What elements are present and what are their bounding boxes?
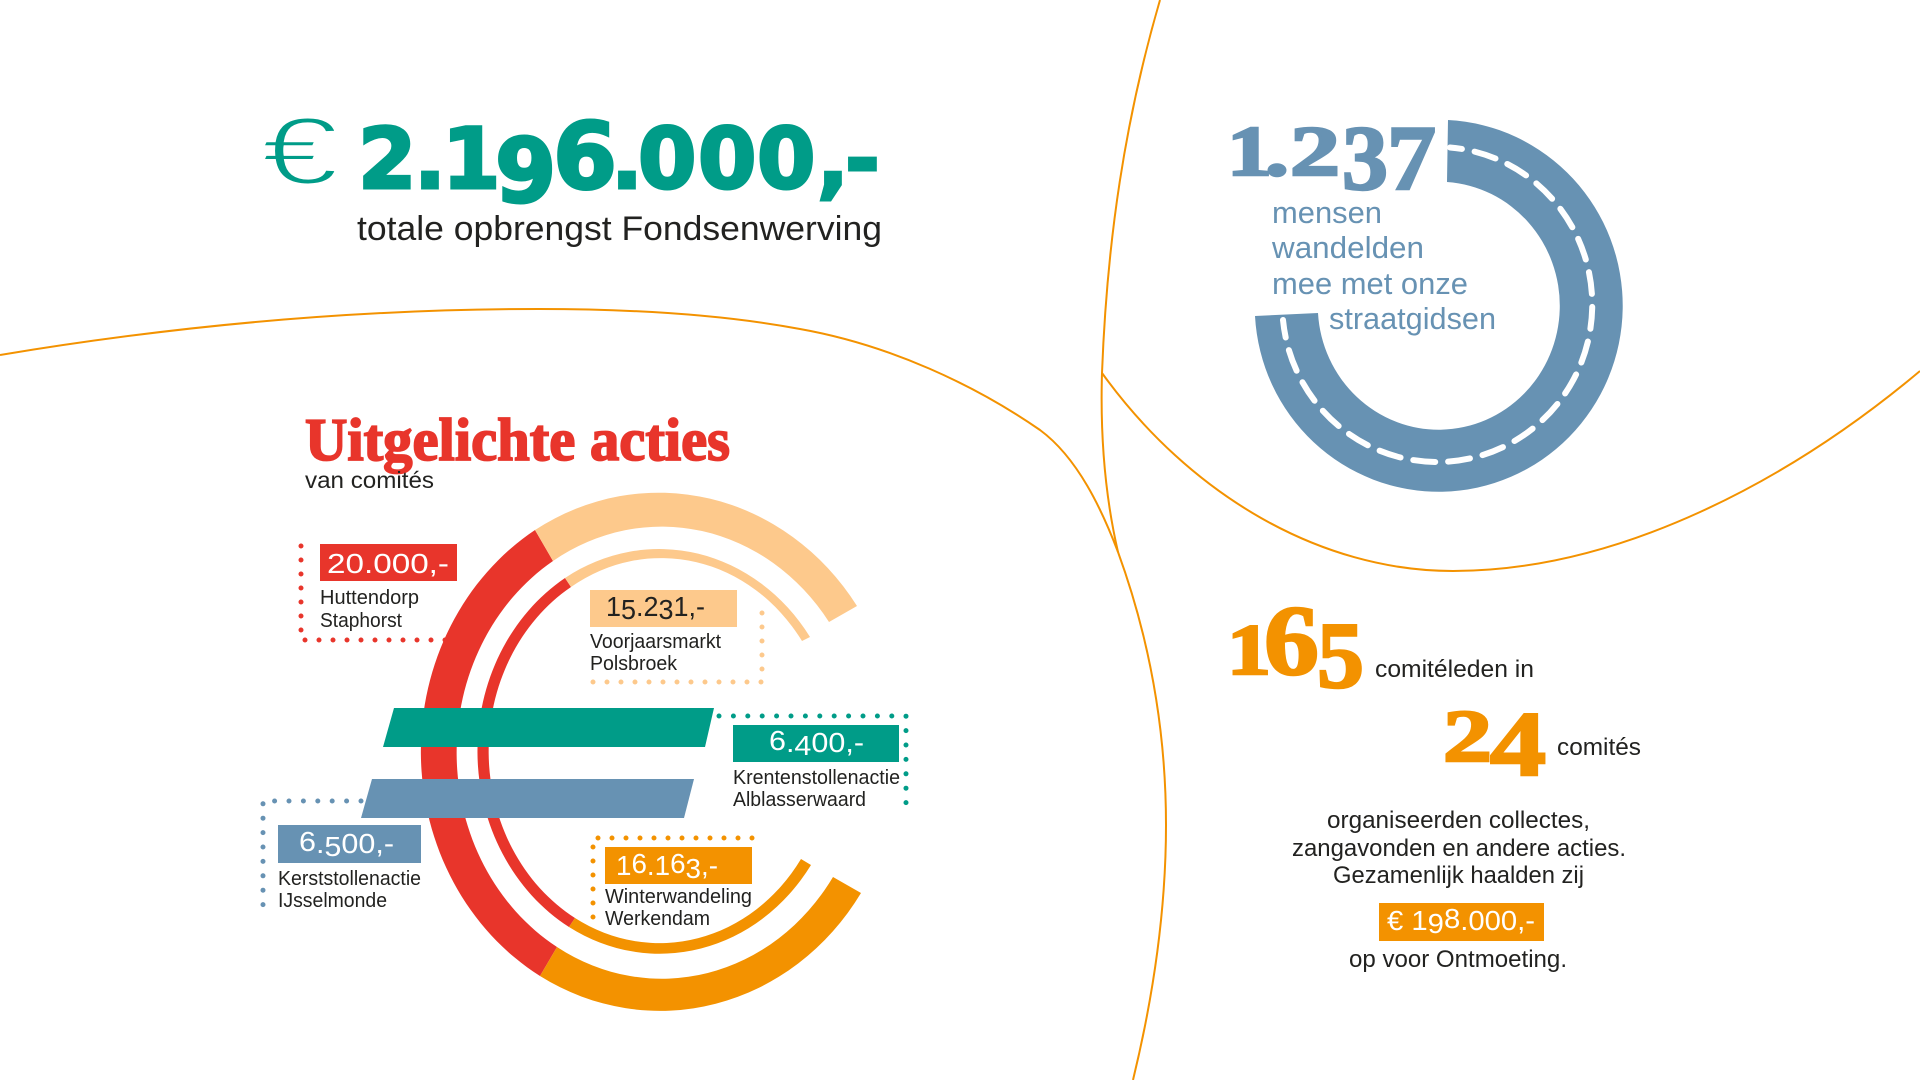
walkers description: wandelden (1271, 230, 1424, 265)
walkers description: mee met onze (1272, 266, 1468, 301)
walkers number: 7 (1387, 107, 1436, 209)
callout: Winterwandeling: 16.163,- (616, 848, 718, 884)
number 165: 1 (1227, 610, 1271, 690)
callout: Voorjaarsmarkt (590, 590, 762, 682)
total amount: 0 (638, 110, 696, 208)
number 165: 6 (1264, 585, 1319, 696)
callout: Huttendorp (301, 544, 457, 640)
panel: total revenue (261, 98, 882, 248)
total amount: 9 (495, 120, 556, 223)
road ring (1255, 120, 1623, 492)
callout: Winterwandeling: Winterwandeling (605, 886, 752, 908)
total amount: , (817, 110, 849, 208)
icon: euro sign: € (261, 98, 339, 205)
road centre dashes (1283, 148, 1592, 462)
outer arc: peach (535, 493, 857, 622)
callout: Krentenstollenactie: Krentenstollenactie (733, 767, 900, 789)
inner arc: orange (569, 859, 811, 954)
total amount: 2 (358, 110, 416, 208)
callout: Krentenstollenactie: 6.400,- (769, 725, 864, 761)
inner arc: peach (565, 549, 810, 641)
walkers description: straatgidsen (1329, 301, 1496, 336)
callout: Winterwandeling (593, 838, 752, 930)
amount badge: € 198.000,- (1387, 903, 1535, 939)
committees text: comités (1557, 734, 1641, 761)
total amount: 0 (757, 110, 815, 208)
total amount: . (611, 110, 643, 208)
total amount: 0 (698, 110, 756, 208)
walkers number: 1 (1227, 113, 1272, 191)
panel: walkers road ring (1227, 107, 1623, 492)
number 24: 4 (1490, 693, 1546, 795)
callout: Kerststollenactie: IJsselmonde (278, 890, 387, 912)
callout: Voorjaarsmarkt: Polsbroek (590, 653, 678, 675)
callout: Voorjaarsmarkt: 15.231,- (606, 591, 705, 625)
closing text: op voor Ontmoeting. (1349, 946, 1567, 973)
subtitle: totale opbrengst Fondsenwerving (357, 210, 882, 248)
walkers number: 2 (1290, 113, 1340, 191)
body text (1292, 807, 1626, 889)
number 24: 2 (1443, 696, 1492, 778)
callout: Krentenstollenactie: Alblasserwaard (733, 789, 866, 811)
body text: Gezamenlijk haalden zij (1333, 862, 1584, 889)
callout: Winterwandeling: Werkendam (605, 908, 710, 930)
heading: Uitgelichte acties (305, 407, 730, 473)
total amount: - (845, 110, 880, 208)
walkers description: mensen (1272, 195, 1382, 230)
walkers description (1271, 195, 1496, 336)
walkers number: 3 (1342, 107, 1388, 209)
panel: highlighted actions (263, 407, 906, 1011)
outer arc: red (421, 530, 557, 976)
number 165: 5 (1317, 604, 1364, 708)
euro bar: teal (383, 708, 714, 747)
total amount: . (414, 110, 446, 208)
panel: committees (1227, 585, 1641, 973)
euro bar: blue (361, 779, 694, 818)
euro chart (361, 493, 861, 1011)
subheading: van comités (305, 467, 434, 493)
callout: Krentenstollenactie (719, 716, 906, 811)
callout: Kerststollenactie: 6.500,- (299, 826, 394, 862)
walkers number: . (1265, 113, 1289, 191)
callout: Kerststollenactie: Kerststollenactie (278, 868, 421, 890)
total amount: 6 (553, 103, 617, 210)
callout: Huttendorp: 20.000,- (327, 548, 449, 579)
body text: zangavonden en andere acties. (1292, 835, 1626, 862)
callout: Huttendorp: Staphorst (320, 610, 402, 632)
inner arc: red (477, 578, 575, 927)
total amount: 1 (442, 110, 500, 208)
callout: Voorjaarsmarkt: Voorjaarsmarkt (590, 631, 721, 653)
committee members text: comitéleden in (1375, 656, 1534, 683)
callout: Kerststollenactie (263, 801, 421, 912)
body text: organiseerden collectes, (1327, 807, 1590, 834)
callout: Huttendorp: Huttendorp (320, 587, 419, 609)
outer arc: orange (540, 877, 861, 1011)
